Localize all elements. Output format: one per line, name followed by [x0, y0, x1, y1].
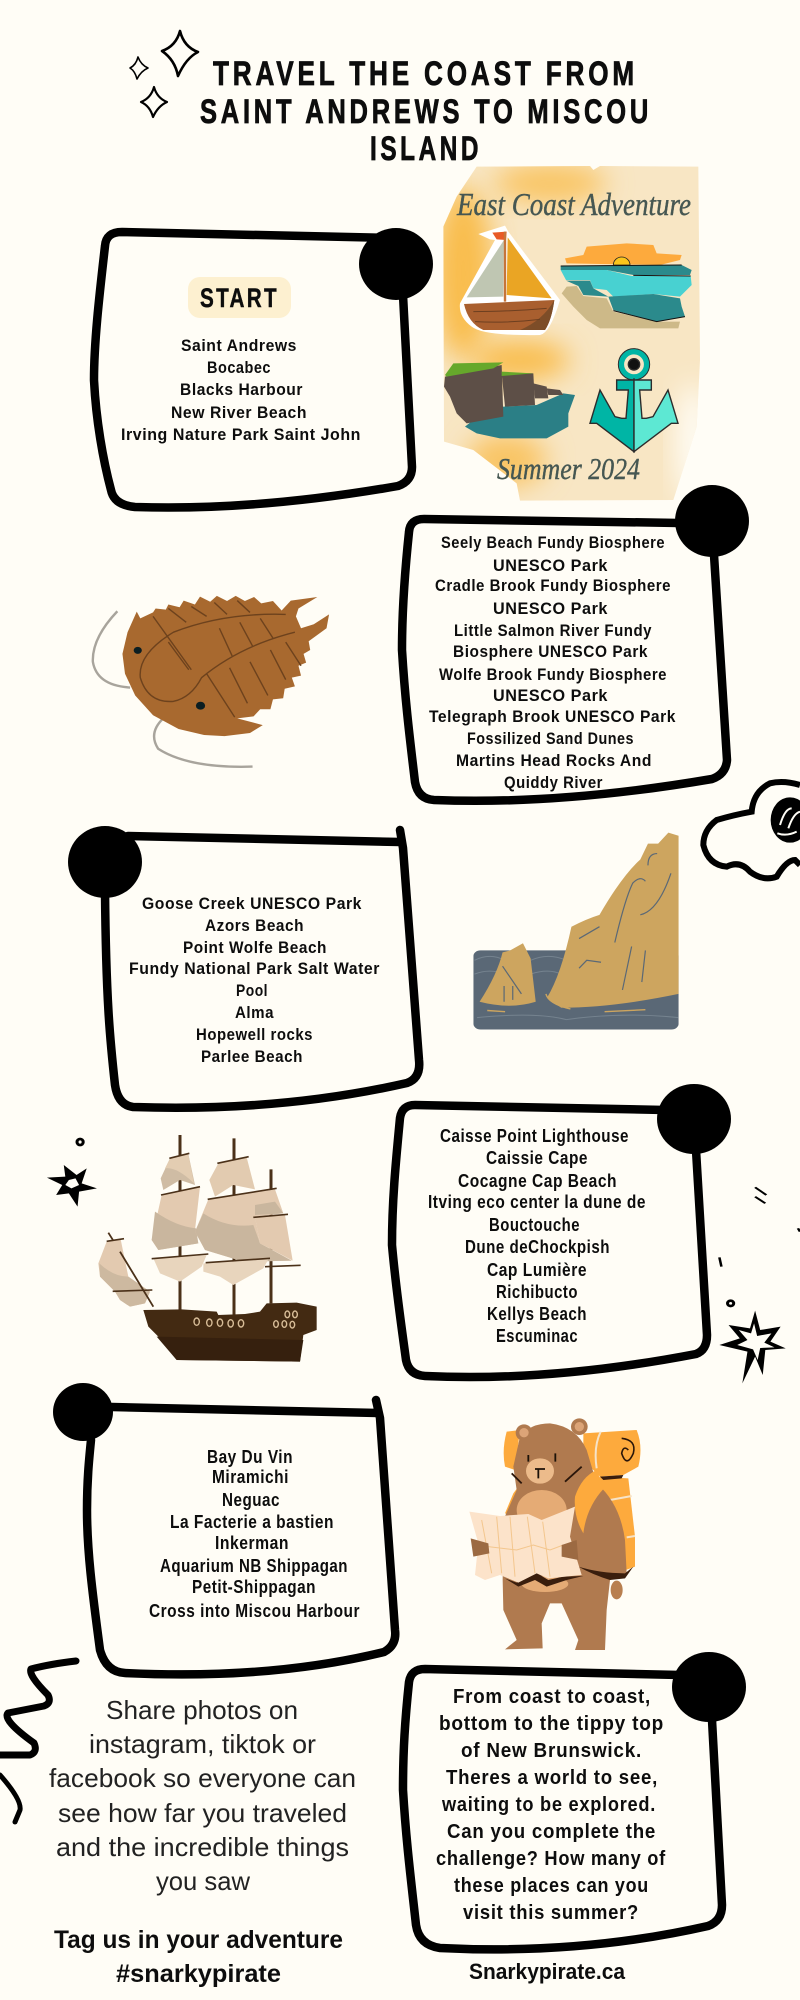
- share photos text: facebook so everyone can: [49, 1763, 356, 1793]
- icon: squiggle doodle: [0, 1661, 76, 1822]
- stops list: Inkerman: [215, 1533, 289, 1553]
- stops list: Fossilized Sand Dunes: [467, 729, 634, 748]
- challenge text: Theres a world to see,: [446, 1767, 658, 1789]
- icon: sailing ship: [98, 1135, 317, 1362]
- icon: left star doodle: [47, 1138, 97, 1207]
- panel: start: [94, 228, 433, 508]
- panel: Bay Du Vin to Miscou: [53, 1383, 395, 1674]
- stops list: Quiddy River: [504, 773, 603, 792]
- icon: trilobite: [93, 596, 329, 767]
- stops list: Caisse Point Lighthouse: [440, 1126, 629, 1146]
- stops list: Bay Du Vin: [207, 1447, 293, 1467]
- challenge text: of New Brunswick.: [461, 1740, 642, 1762]
- stops list: Bouctouche: [489, 1215, 580, 1235]
- stops list: Itving eco center la dune de: [428, 1192, 646, 1212]
- stops list: Miramichi: [212, 1467, 289, 1487]
- stops list: Cap Lumière: [487, 1260, 587, 1280]
- stops list: UNESCO Park: [493, 686, 608, 705]
- stops list: [149, 1447, 360, 1621]
- icon: sunset beach: [561, 243, 692, 328]
- icon: scribble flower: [703, 782, 800, 878]
- stops list: Seely Beach Fundy Biosphere: [441, 533, 665, 552]
- stops list: Martins Head Rocks And: [456, 751, 652, 770]
- start stops list: [121, 336, 361, 444]
- panel: Caisse Point to Escuminac: [392, 1084, 731, 1377]
- start stops list: Irving Nature Park Saint John: [121, 425, 361, 444]
- share photos text: Share photos on: [106, 1695, 298, 1725]
- start stops list: Blacks Harbour: [180, 380, 303, 399]
- icon: anchor: [590, 349, 678, 452]
- share photos text: instagram, tiktok or: [89, 1729, 316, 1759]
- challenge text: waiting to be explored.: [441, 1794, 656, 1816]
- icon: sea rocks: [473, 833, 679, 1029]
- start stops list: Saint Andrews: [181, 336, 297, 355]
- stops list: Escuminac: [496, 1326, 578, 1346]
- share photos text: and the incredible things: [56, 1832, 349, 1862]
- icon: sparkles: [130, 31, 198, 117]
- panel: Goose Creek to Parlee Beach: [68, 826, 419, 1108]
- challenge text: visit this summer?: [463, 1902, 639, 1924]
- stops list: Wolfe Brook Fundy Biosphere: [439, 665, 667, 684]
- stops list: Dune deChockpish: [465, 1237, 610, 1257]
- share photos text: you saw: [156, 1866, 250, 1896]
- icon: sailboat: [460, 226, 560, 335]
- stops list: Fundy National Park Salt Water: [129, 959, 380, 978]
- stops list: UNESCO Park: [493, 599, 608, 618]
- challenge text: Can you complete the: [447, 1821, 656, 1843]
- start stops list: Bocabec: [207, 358, 271, 377]
- challenge text: From coast to coast,: [453, 1686, 651, 1708]
- postcard: East Coast Adventure: Summer 2024: [497, 451, 640, 486]
- title: [200, 55, 652, 168]
- stops list: Neguac: [222, 1490, 280, 1510]
- start stops list: New River Beach: [171, 403, 307, 422]
- challenge text: these places can you: [454, 1875, 649, 1897]
- stops list: Goose Creek UNESCO Park: [142, 894, 362, 913]
- hashtag callout: #snarkypirate: [116, 1960, 281, 1988]
- panel: Fundy biosphere stops: [402, 485, 749, 801]
- stops list: [429, 533, 676, 792]
- website: Snarkypirate.ca: [469, 1959, 626, 1984]
- stops list: UNESCO Park: [493, 556, 608, 575]
- stops list: La Facterie a bastien: [170, 1512, 334, 1532]
- postcard: East Coast Adventure: East Coast Adventure: [456, 186, 691, 222]
- start badge: START: [200, 283, 279, 313]
- share photos text: [49, 1695, 356, 1896]
- stops list: Little Salmon River Fundy: [454, 621, 652, 640]
- hashtag callout: [54, 1926, 343, 1988]
- stops list: Aquarium NB Shippagan: [160, 1556, 348, 1576]
- stops list: Caissie Cape: [486, 1148, 588, 1168]
- stops list: Telegraph Brook UNESCO Park: [429, 707, 676, 726]
- stops list: [428, 1126, 646, 1346]
- stops list: Parlee Beach: [201, 1047, 303, 1066]
- stops list: Richibucto: [496, 1282, 578, 1302]
- stops list: Hopewell rocks: [196, 1025, 313, 1044]
- stops list: Cross into Miscou Harbour: [149, 1601, 360, 1621]
- stops list: Pool: [236, 981, 268, 1000]
- stops list: Alma: [235, 1003, 274, 1022]
- icon: sea cliffs: [444, 362, 575, 438]
- challenge text: [436, 1686, 666, 1924]
- stops list: Petit-Shippagan: [192, 1577, 316, 1597]
- panel: challenge: [403, 1652, 746, 1949]
- stops list: [129, 894, 380, 1066]
- stops list: Point Wolfe Beach: [183, 938, 327, 957]
- challenge text: challenge? How many of: [436, 1848, 666, 1870]
- stops list: Cocagne Cap Beach: [458, 1171, 617, 1191]
- title: TRAVEL THE COAST FROM: [213, 55, 638, 93]
- stops list: Azors Beach: [205, 916, 304, 935]
- postcard: East Coast Adventure: [433, 163, 710, 503]
- stops list: Kellys Beach: [487, 1304, 587, 1324]
- challenge text: bottom to the tippy top: [439, 1713, 664, 1735]
- stops list: Biosphere UNESCO Park: [453, 642, 648, 661]
- icon: right star doodle: [719, 1187, 800, 1383]
- stops list: Cradle Brook Fundy Biosphere: [435, 576, 671, 595]
- hashtag callout: Tag us in your adventure: [54, 1926, 343, 1954]
- title: SAINT ANDREWS TO MISCOU: [200, 93, 652, 131]
- start badge: [188, 277, 291, 318]
- share photos text: see how far you traveled: [58, 1798, 347, 1828]
- title: ISLAND: [370, 130, 482, 168]
- icon: bear with map and backpack: [469, 1418, 640, 1650]
